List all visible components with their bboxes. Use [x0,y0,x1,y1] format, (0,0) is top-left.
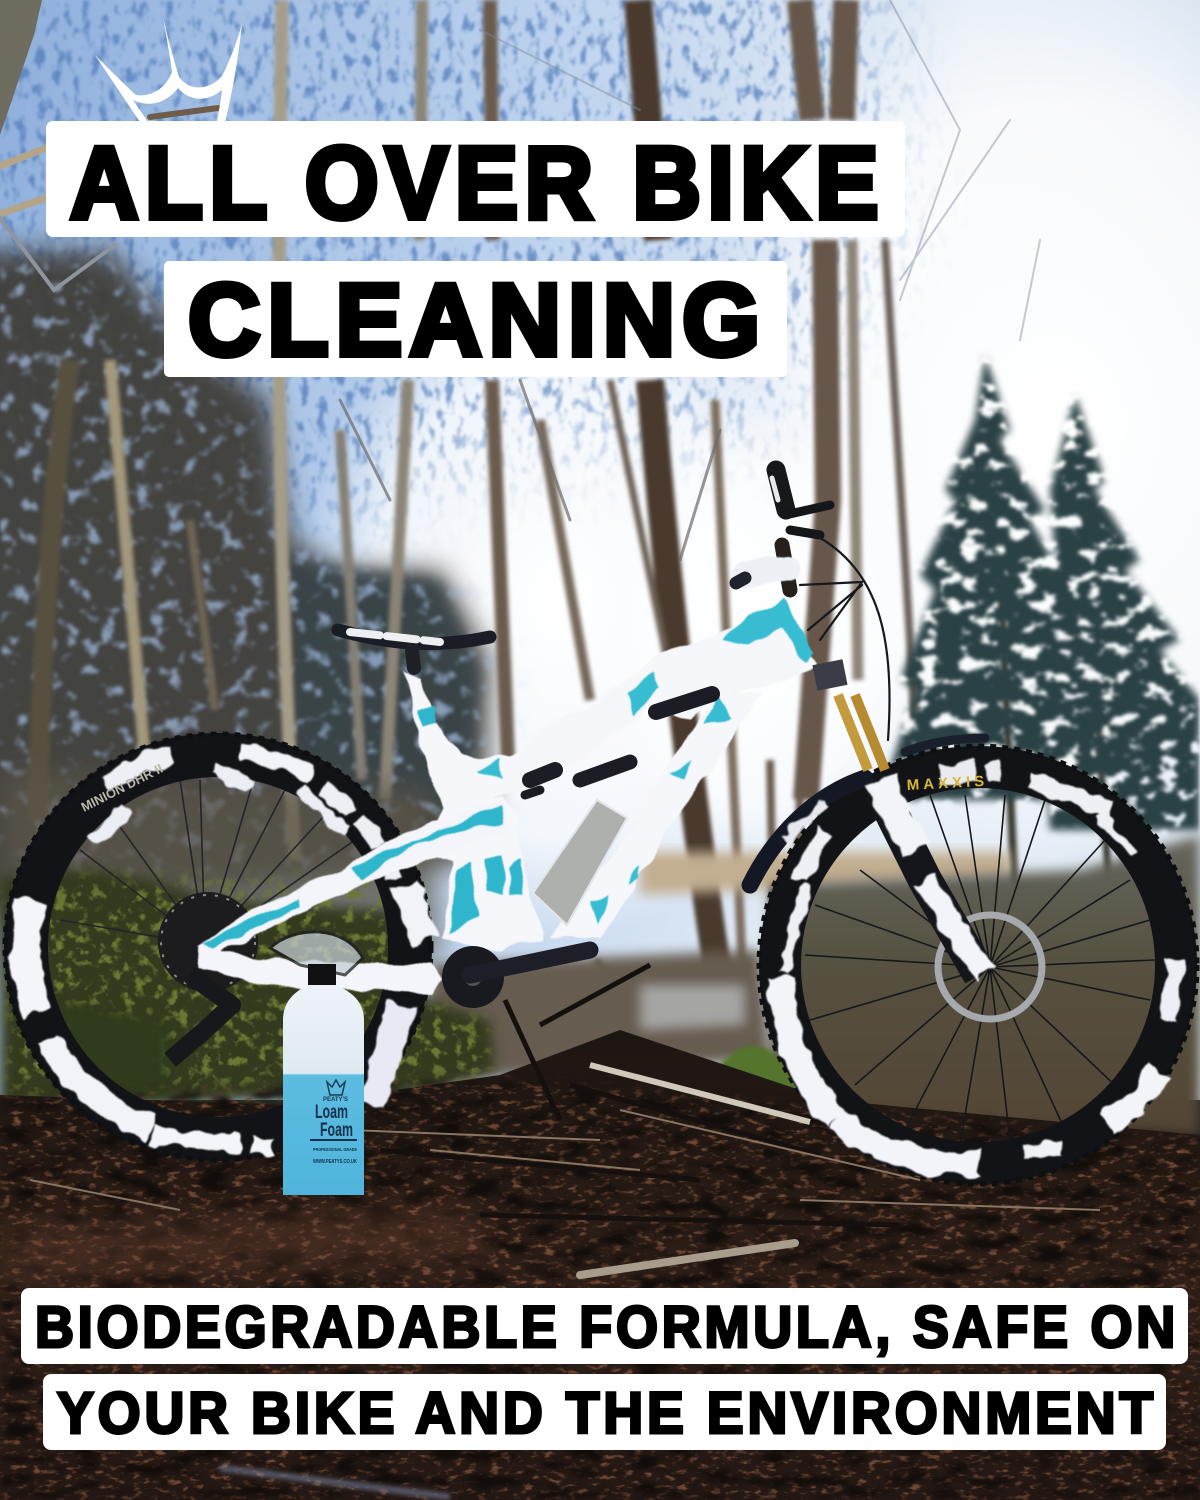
rear wheel: MINION DHR II [79,761,165,815]
background: conifer trees [880,355,1200,830]
water bottle [533,800,627,925]
product bottle: Loam Foam: PROFESSIONAL GRADE [313,1147,357,1152]
background: left woodland foliage [0,230,500,920]
handlebar and cables [736,470,890,740]
cassette and derailleur [158,892,258,1060]
top tube and seat tube [404,600,816,807]
crank and chainring [442,946,590,1008]
background: sky [0,0,1200,1100]
caption panel: line two: YOUR BIKE AND THE ENVIRONMENT [57,1381,1157,1446]
down tube [550,693,760,939]
background: blue twig canopy [0,0,880,520]
product bottle: Loam Foam [283,964,364,1195]
cyan paint patches [722,600,815,662]
shock and linkage [525,694,712,795]
chain stay [197,947,443,993]
background: branches [0,0,1040,560]
product bottle: Loam Foam: Loam [315,1102,348,1123]
product bottle: Loam Foam: Foam [320,1120,353,1141]
background: tan hillside and low woodland [0,770,1200,1135]
crown logo [95,17,242,122]
forest floor [0,965,1200,1500]
moss-covered log [0,870,1200,1165]
title panel: line one: ALL OVER BIKE [70,126,885,240]
background: left tree trunk top corner [0,0,42,135]
spray head behind bottle [270,932,363,975]
background: tree trunks [38,0,1110,1020]
bike [5,470,1197,1184]
rear wheel [5,734,431,1160]
frame with foam [197,600,816,993]
front wheel: MAXXIS [906,773,989,794]
bottom bracket cluster [427,795,543,950]
front wheel [759,746,1197,1184]
seat stay [197,800,510,960]
saddle and seatpost [338,630,490,668]
product bottle: Loam Foam: PEATY'S [323,1097,348,1103]
title panel: line two: CLEANING [188,263,767,377]
fork and front mudguard [750,672,985,975]
product bottle: Loam Foam: WWW.PEATYS.CO.UK [313,1159,357,1165]
